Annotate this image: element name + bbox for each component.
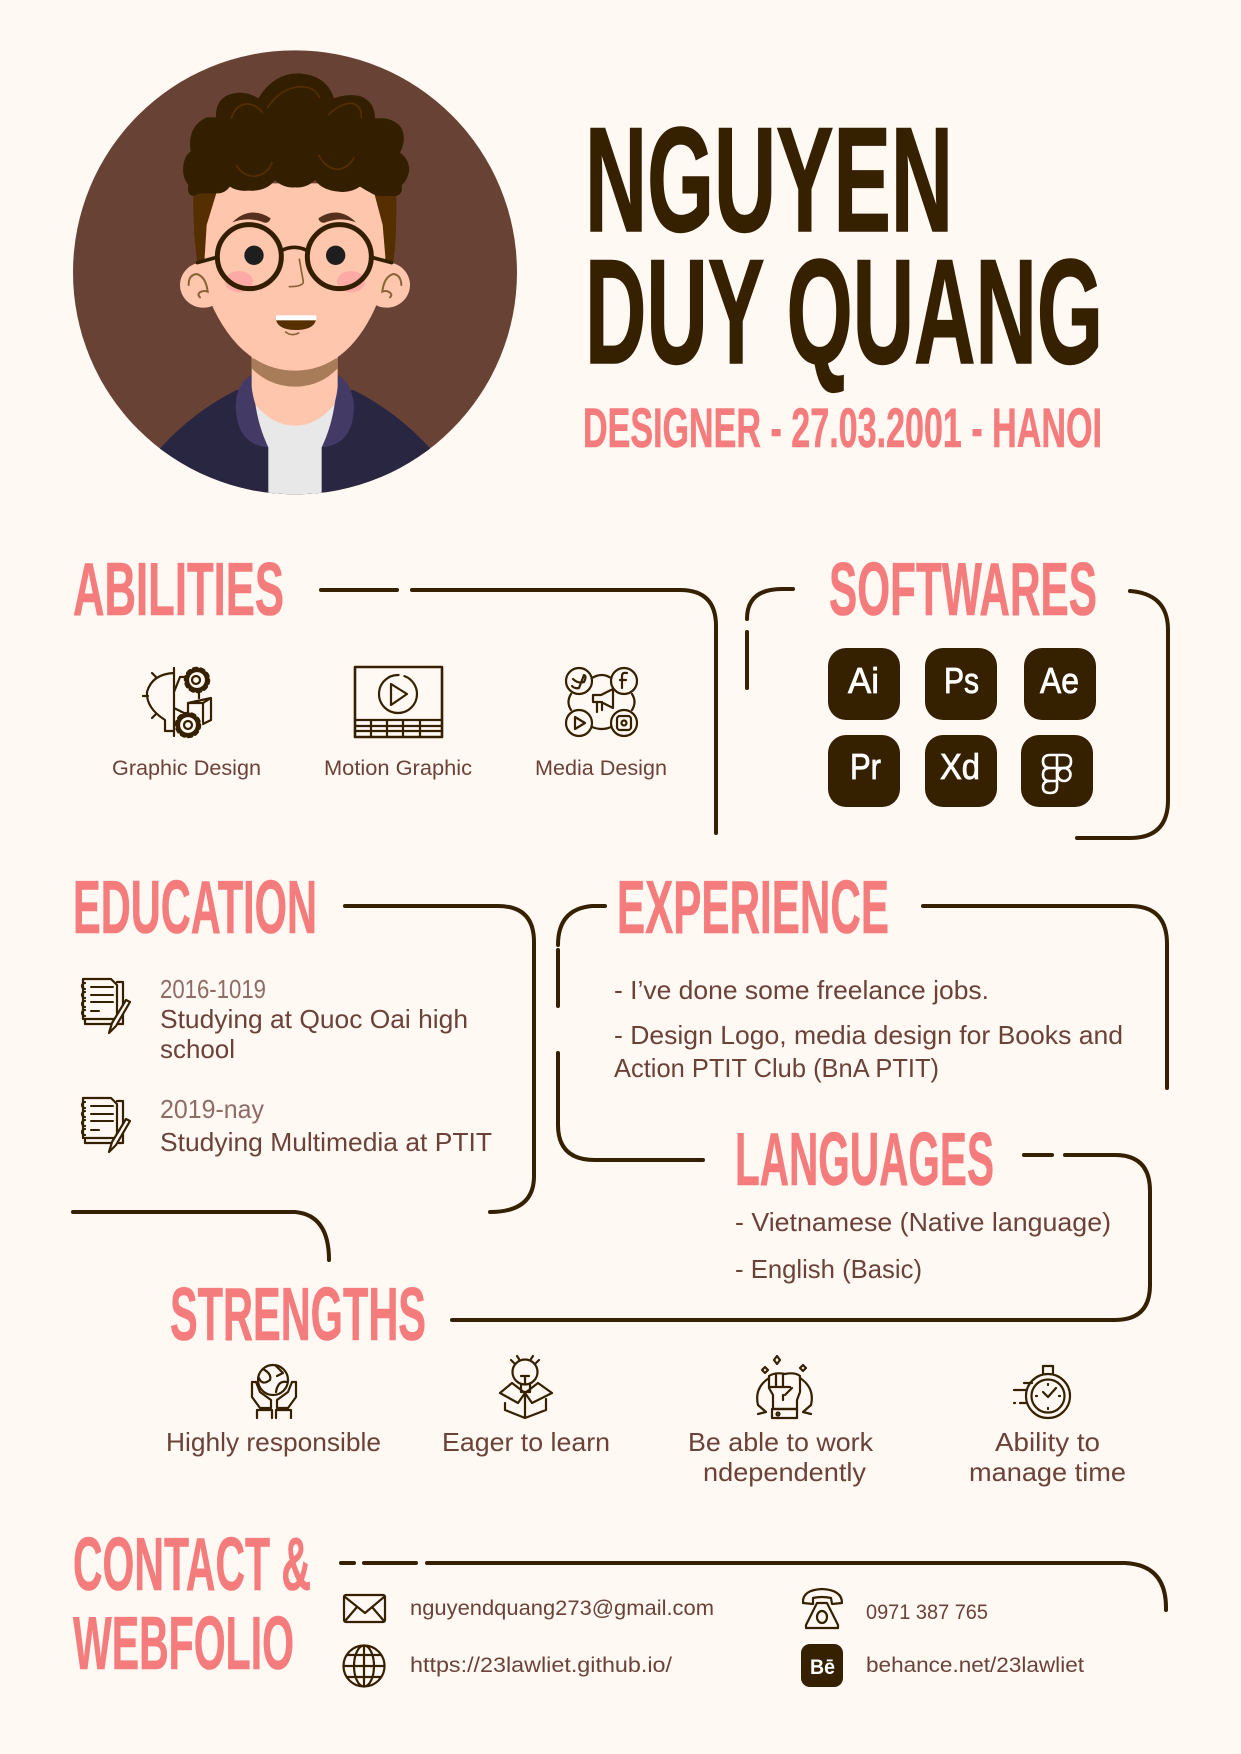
abilities heading: ABILITIES [73, 547, 284, 631]
contact heading: CONTACT & [73, 1522, 311, 1606]
experience text: - Design Logo, media design for Books and [614, 1020, 1123, 1050]
education item 1: school [160, 1034, 235, 1064]
date 1: 2016-1019 [160, 974, 266, 1004]
label: media design: Media Design [535, 757, 667, 780]
icon: globe [344, 1646, 384, 1686]
label: motion graphic: Motion Graphic [324, 757, 472, 780]
icon: raised fist [757, 1356, 812, 1418]
icon: mail [344, 1595, 385, 1622]
name title [585, 96, 1103, 395]
label: work independently: Be able to work [688, 1427, 874, 1457]
label: manage time: Ability to [995, 1427, 1100, 1457]
behance link: behance.net/23lawliet [866, 1654, 1084, 1677]
label: manage time: manage time [969, 1457, 1126, 1487]
name title: NGUYEN [585, 96, 953, 263]
languages heading: LANGUAGES [735, 1117, 994, 1201]
icon: stopwatch [1014, 1366, 1070, 1418]
education connector line [345, 906, 534, 1212]
strengths heading: STRENGTHS [170, 1272, 426, 1356]
icon: Figma [1021, 735, 1093, 807]
languages connector lines [452, 1053, 1150, 1320]
icon: idea box [500, 1356, 552, 1418]
contact connector line [341, 1563, 1166, 1610]
date 2: 2019-nay [160, 1094, 264, 1124]
website: https://23lawliet.github.io/ [410, 1654, 672, 1677]
icon: hands with globe [252, 1365, 296, 1418]
label: highly responsible: Highly responsible [166, 1427, 381, 1457]
icon: telephone [803, 1589, 842, 1628]
icon: media design [566, 668, 637, 736]
panel: contact and webfolio [73, 1522, 1166, 1687]
icon: behance [801, 1644, 843, 1687]
panel: experience [558, 865, 1167, 1088]
softwares bracket lines [747, 589, 1168, 838]
label: work independently: ndependently [703, 1457, 866, 1487]
email: nguyendquang273@gmail.com [410, 1597, 714, 1620]
icon: After Effects [1024, 648, 1096, 720]
strengths connector line [73, 1212, 329, 1260]
panel: education [73, 865, 534, 1212]
panel: abilities [73, 547, 716, 833]
contact heading: WEBFOLIO [73, 1601, 294, 1685]
label: work independently [688, 1427, 874, 1487]
icon: notebook 2 [82, 1098, 130, 1152]
hair [183, 73, 409, 196]
education item 1: Studying at Quoc Oai high [160, 1004, 468, 1034]
icon: notebook 1 [82, 979, 130, 1033]
label: eager to learn: Eager to learn [442, 1427, 610, 1457]
portrait avatar [73, 50, 517, 507]
icon: Premiere [828, 735, 900, 807]
abilities connector line [321, 590, 716, 833]
experience connector lines [558, 906, 1167, 1088]
panel: languages [452, 1053, 1150, 1320]
icon: Photoshop [925, 648, 997, 720]
languages text: - English (Basic) [735, 1254, 922, 1284]
education item 2: Studying Multimedia at PTIT [160, 1127, 492, 1157]
languages text [735, 1207, 1111, 1284]
icon: behance: Bē [810, 1656, 835, 1679]
icon: XD: Xd [940, 746, 980, 787]
icon: Photoshop: Ps [944, 660, 979, 701]
languages text: - Vietnamese (Native language) [735, 1207, 1111, 1237]
phone number: 0971 387 765 [866, 1601, 988, 1624]
icon: Illustrator [828, 648, 900, 720]
experience heading: EXPERIENCE [617, 865, 889, 949]
experience text: - I’ve done some freelance jobs. [614, 975, 989, 1005]
experience text: Action PTIT Club (BnA PTIT) [614, 1053, 939, 1083]
education item 1 [160, 1004, 468, 1064]
icon: Premiere: Pr [850, 746, 881, 787]
experience text [614, 975, 1123, 1083]
label: graphic design: Graphic Design [112, 757, 261, 780]
icon: XD [925, 735, 997, 807]
label: manage time [969, 1427, 1126, 1487]
icon: graphic design [143, 668, 211, 736]
contact heading [73, 1522, 311, 1685]
icon: motion graphic [355, 667, 442, 737]
icon: After Effects: Ae [1040, 660, 1079, 701]
education heading: EDUCATION [73, 865, 317, 949]
panel: softwares [747, 547, 1168, 838]
panel: strengths [73, 1212, 1126, 1487]
icon: Illustrator: Ai [848, 660, 879, 701]
